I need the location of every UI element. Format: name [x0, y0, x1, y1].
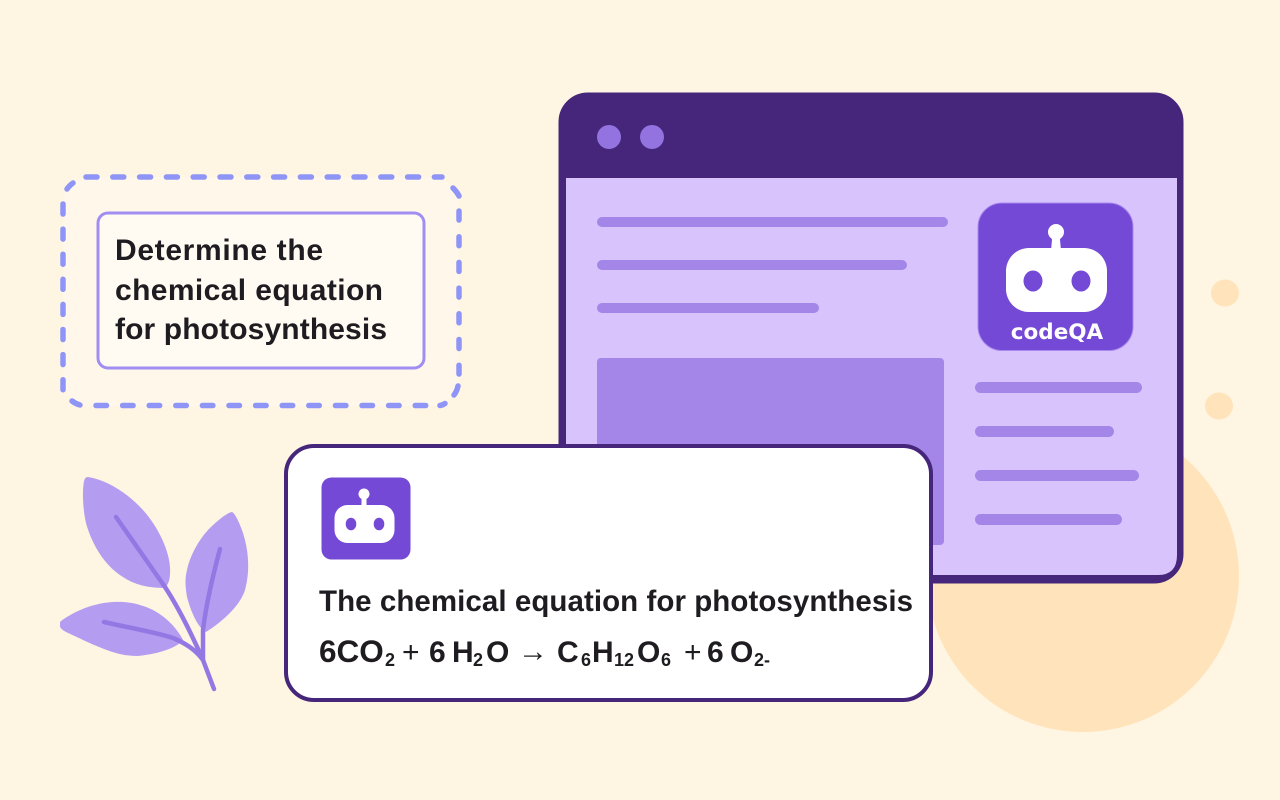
chemical equation: - [764, 650, 770, 670]
small peach dot top [1211, 280, 1239, 306]
question panel [63, 177, 459, 406]
answer heading: The chemical equation for photosynthesis [319, 585, 913, 618]
sidebar placeholder lines [975, 382, 1142, 525]
browser title bar [559, 93, 1183, 178]
chemical equation: H [452, 636, 474, 669]
chemical equation: O [486, 636, 509, 669]
chemical equation: O [730, 636, 753, 669]
text placeholder lines [597, 217, 948, 313]
answer card [286, 446, 931, 700]
robot icon large [1006, 224, 1107, 312]
chemical equation: 2 [473, 650, 483, 670]
chemical equation: → [518, 635, 548, 668]
question box [98, 213, 424, 368]
browser window [559, 93, 1183, 583]
chemical equation: H [592, 636, 614, 669]
robot icon small [322, 478, 410, 560]
question text: Determine the [115, 234, 323, 267]
chemical equation: 6 [661, 650, 671, 670]
image placeholder [597, 358, 944, 545]
chemical equation: O [637, 636, 660, 669]
chemical equation: + [684, 636, 702, 669]
question text [115, 234, 387, 346]
chemical equation: 2 [754, 650, 764, 670]
chemical equation: + [402, 636, 420, 669]
codeQA logo tile [978, 203, 1133, 350]
question text: chemical equation [115, 274, 383, 307]
small peach dot bottom [1205, 392, 1233, 420]
window dot left [597, 125, 621, 149]
dashed outer frame [63, 177, 459, 406]
logo label: codeQA [1011, 320, 1104, 345]
leaf plant illustration [60, 477, 248, 689]
chemical equation: 6CO [319, 633, 384, 669]
window dot right [640, 125, 664, 149]
decorative peach circle [927, 420, 1239, 732]
chemical equation: 6 [429, 636, 446, 669]
chemical equation: 2 [385, 650, 395, 670]
chemical equation: 12 [614, 650, 634, 670]
chemical equation: 6 [707, 636, 724, 669]
chemical equation: 6 [581, 650, 591, 670]
question text: for photosynthesis [115, 313, 387, 346]
chemical equation: C [557, 636, 579, 669]
